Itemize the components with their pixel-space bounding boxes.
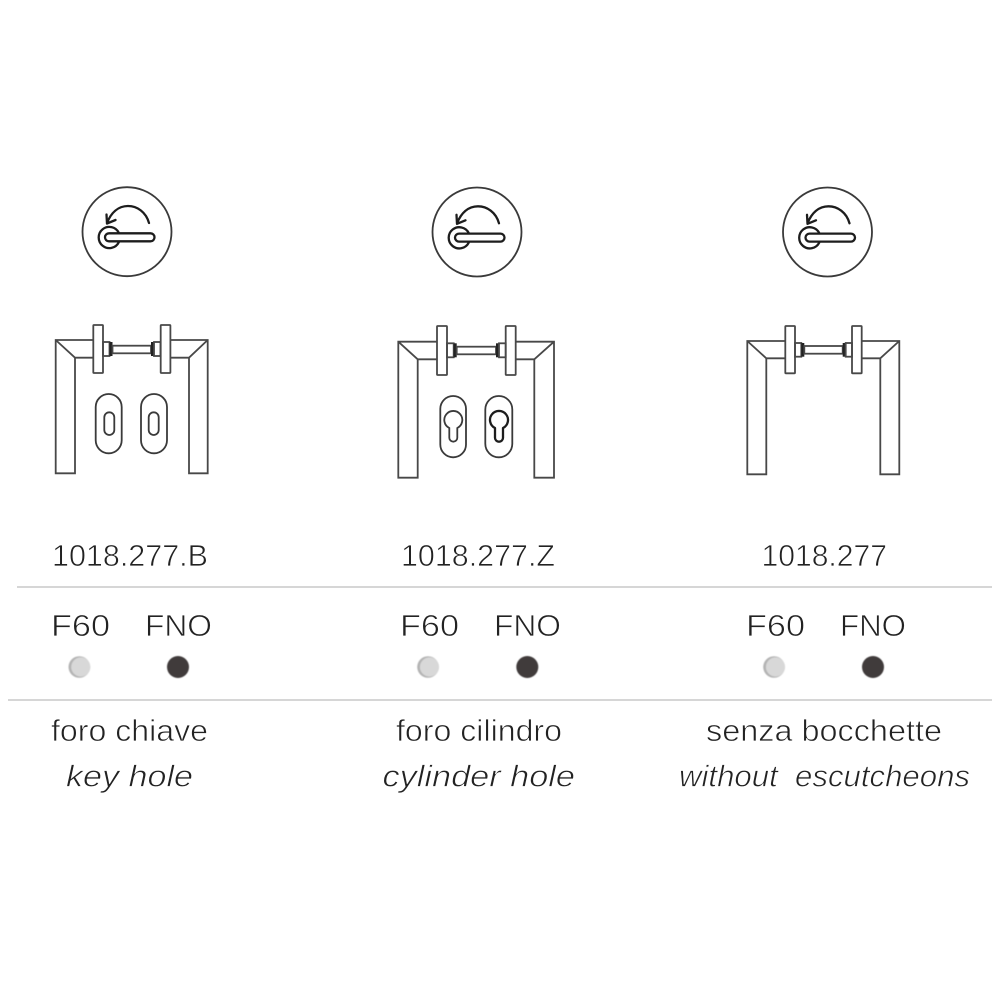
description English: without escutcheons: [679, 758, 970, 794]
technical drawing: handle pair without escutcheons: [747, 326, 899, 474]
finish label FNO: FNO: [840, 608, 906, 643]
swatch: F60 light: [417, 656, 439, 678]
panel: without escutcheons variant: [679, 188, 970, 794]
description Italian: senza bocchette: [706, 713, 942, 748]
product code: 1018.277.Z: [401, 538, 555, 573]
description Italian: foro cilindro: [396, 713, 562, 748]
description English: cylinder hole: [382, 758, 575, 794]
technical drawing: handle pair with key escutcheons: [56, 325, 208, 473]
finish label FNO: FNO: [145, 608, 212, 643]
finish label F60: F60: [51, 608, 110, 643]
swatch: FNO dark: [167, 656, 189, 678]
icon: rotating lever handle, left-hand: [82, 187, 172, 276]
product code: 1018.277.B: [52, 538, 208, 573]
icon: rotating lever handle, right: [783, 188, 872, 276]
panel: cylinder hole variant: [382, 188, 575, 794]
finish label FNO: FNO: [494, 608, 561, 643]
swatch: F60 light: [763, 656, 785, 678]
description English: key hole: [66, 758, 193, 794]
product code: 1018.277: [762, 538, 887, 573]
swatch: FNO dark: [862, 656, 884, 678]
description Italian: foro chiave: [51, 713, 208, 748]
finish label F60: F60: [746, 608, 805, 643]
swatch: FNO dark: [516, 656, 538, 678]
swatch: F60 light: [68, 656, 90, 678]
panel: key hole variant: [51, 187, 212, 793]
technical drawing: handle pair with cylinder escutcheons: [398, 326, 554, 478]
finish label F60: F60: [400, 608, 459, 643]
icon: rotating lever handle, centre: [432, 188, 522, 276]
